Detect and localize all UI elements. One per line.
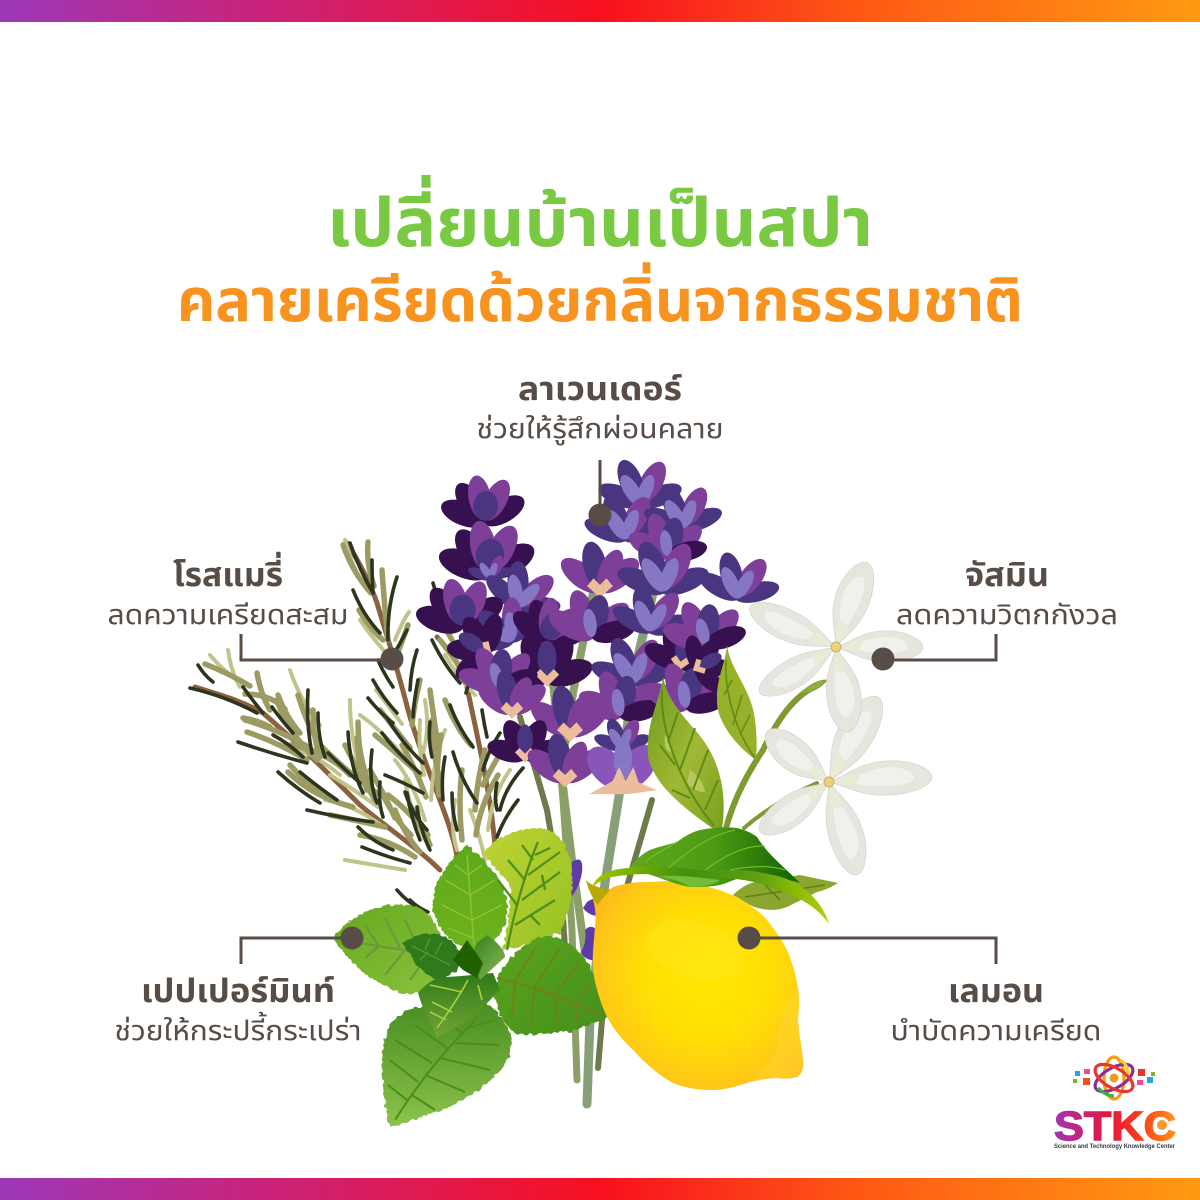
peppermint dot bbox=[340, 926, 364, 950]
lemon benefit: บำบัดความเครียด bbox=[890, 1015, 1102, 1046]
top gradient bar bbox=[0, 0, 1200, 22]
callout: peppermint bbox=[114, 926, 364, 1046]
large leaf bbox=[648, 677, 724, 828]
jasmine dot bbox=[872, 648, 894, 670]
upper jasmine flower bbox=[743, 556, 923, 734]
lemon leaf bbox=[592, 827, 829, 924]
callout: jasmine bbox=[872, 556, 1118, 670]
mint bbox=[332, 828, 607, 1127]
jasmine flowers bbox=[743, 556, 933, 879]
mint leaf front bbox=[418, 973, 500, 1038]
small leaf bbox=[717, 645, 757, 760]
rosemary bbox=[190, 540, 523, 912]
rosemary name: โรสแมรี่ bbox=[173, 551, 283, 593]
jasmine name: จัสมิน bbox=[965, 556, 1049, 593]
rosemary dot bbox=[380, 648, 404, 670]
mint leaf top centre bbox=[433, 845, 507, 955]
rosemary benefit: ลดความเครียดสะสม bbox=[108, 599, 348, 630]
logo atom icon bbox=[1091, 1057, 1137, 1099]
jasmine benefit: ลดความวิตกกังวล bbox=[896, 599, 1118, 630]
mint leaf yellow bbox=[483, 828, 572, 950]
rosemary leader bbox=[241, 634, 392, 660]
mint leaf right bbox=[495, 936, 607, 1035]
lavender benefit: ช่วยให้รู้สึกผ่อนคลาย bbox=[476, 413, 724, 446]
lavender stems bbox=[502, 583, 700, 1104]
small purple buds behind lemon bbox=[568, 860, 599, 960]
mint leaf left bbox=[332, 905, 450, 994]
stem nub bbox=[586, 880, 610, 905]
callout: lemon bbox=[738, 926, 1102, 1046]
herb bouquet illustration bbox=[190, 456, 933, 1127]
title bbox=[177, 175, 1023, 334]
logo tagline: Science and Technology Knowledge Center bbox=[1054, 1143, 1175, 1150]
lemon bbox=[586, 827, 838, 1090]
lavender dot bbox=[588, 504, 612, 526]
jasmine leader bbox=[883, 634, 996, 660]
lavender name: ลาเวนเดอร์ bbox=[518, 370, 682, 407]
bottom gradient bar bbox=[0, 1178, 1200, 1200]
peppermint leader bbox=[241, 938, 352, 964]
mint leaf bottom bbox=[382, 1001, 511, 1127]
peppermint name: เปปเปอร์มินท์ bbox=[141, 972, 335, 1009]
lemon soft highlight bbox=[639, 910, 751, 990]
lemon tip tint bbox=[750, 983, 803, 1082]
lemon dot bbox=[738, 926, 760, 950]
STKC logo bbox=[1054, 1057, 1176, 1150]
jasmine leaves bbox=[648, 645, 757, 828]
lemon fruit bbox=[593, 881, 803, 1090]
logo wordmark: STKC bbox=[1054, 1103, 1176, 1149]
peppermint benefit: ช่วยให้กระปรี้กระเปร่า bbox=[114, 1011, 362, 1046]
lower jasmine flower bbox=[752, 688, 933, 879]
logo coloured squares bbox=[1073, 1069, 1155, 1085]
callout: lavender bbox=[476, 370, 724, 526]
jasmine stems bbox=[726, 680, 827, 828]
back leaf bbox=[733, 875, 838, 910]
mint leaf centre dark bbox=[453, 940, 483, 978]
title line 2: คลายเครียดด้วยกลิ่นจากธรรมชาติ bbox=[177, 262, 1023, 334]
mint leaf centre bud bbox=[470, 935, 505, 980]
mint leaf small dark bbox=[402, 933, 460, 980]
lavender leader bbox=[598, 460, 602, 515]
lemon leader bbox=[749, 938, 996, 964]
lemon name: เลมอน bbox=[948, 972, 1044, 1009]
logo wordmark dot bbox=[1157, 1120, 1167, 1130]
title line 1: เปลี่ยนบ้านเป็นสปา bbox=[327, 175, 873, 261]
lavender flowers bbox=[409, 456, 787, 960]
callout: rosemary bbox=[108, 551, 404, 670]
